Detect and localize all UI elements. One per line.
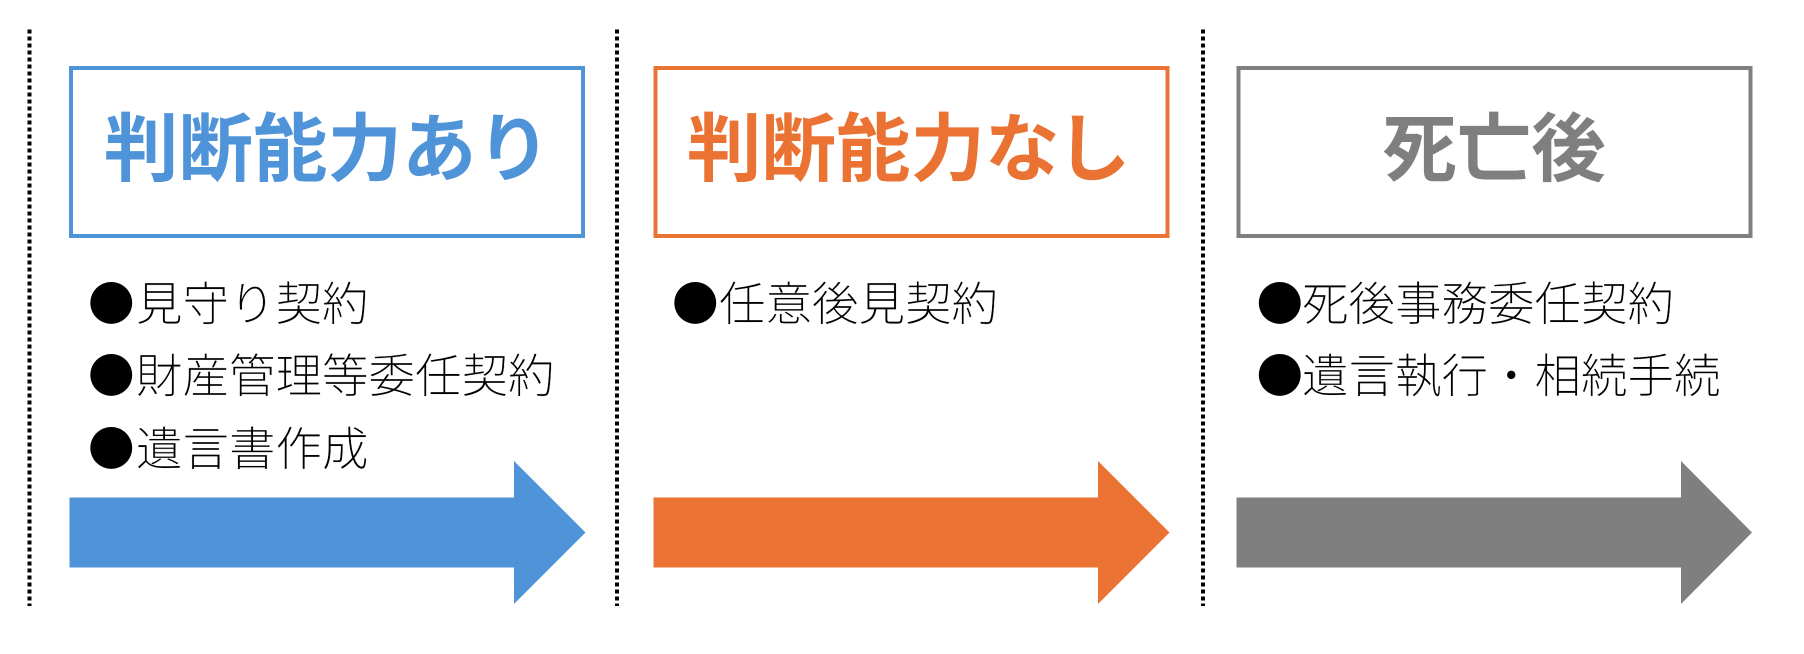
heading box: 判断能力なし: 判断能力なし bbox=[687, 90, 1131, 197]
arrow: orange bbox=[654, 461, 1170, 604]
panel: after incapacity bbox=[654, 68, 1170, 604]
list: before incapacity: 遺言書作成 bbox=[136, 412, 368, 480]
list: before incapacity: ● bbox=[88, 268, 134, 334]
heading box: 死亡後: 死亡後 bbox=[1382, 90, 1606, 197]
panel: before incapacity bbox=[70, 68, 586, 604]
list: after incapacity: ● bbox=[672, 268, 718, 334]
list: after death: ● bbox=[1256, 340, 1303, 406]
list: before incapacity: 見守り契約 bbox=[136, 268, 368, 334]
arrow: gray bbox=[1236, 461, 1752, 604]
heading box: 判断能力あり bbox=[71, 68, 583, 236]
heading box: 死亡後 bbox=[1238, 68, 1750, 236]
list: after death: ● bbox=[1256, 268, 1303, 334]
list: before incapacity: ● bbox=[88, 412, 134, 480]
list: before incapacity: ● bbox=[88, 340, 134, 406]
list: after incapacity: 任意後見契約 bbox=[719, 268, 998, 334]
arrow: blue bbox=[70, 461, 586, 604]
heading box: 判断能力なし bbox=[656, 68, 1168, 236]
list: after death: 死後事務委任契約 bbox=[1302, 268, 1674, 334]
panel: after death bbox=[1236, 68, 1752, 604]
list: after death: 遺言執行・相続手続 bbox=[1302, 340, 1720, 406]
heading box: 判断能力あり: 判断能力あり bbox=[104, 90, 551, 197]
list: before incapacity: 財産管理等委任契約 bbox=[136, 340, 554, 406]
